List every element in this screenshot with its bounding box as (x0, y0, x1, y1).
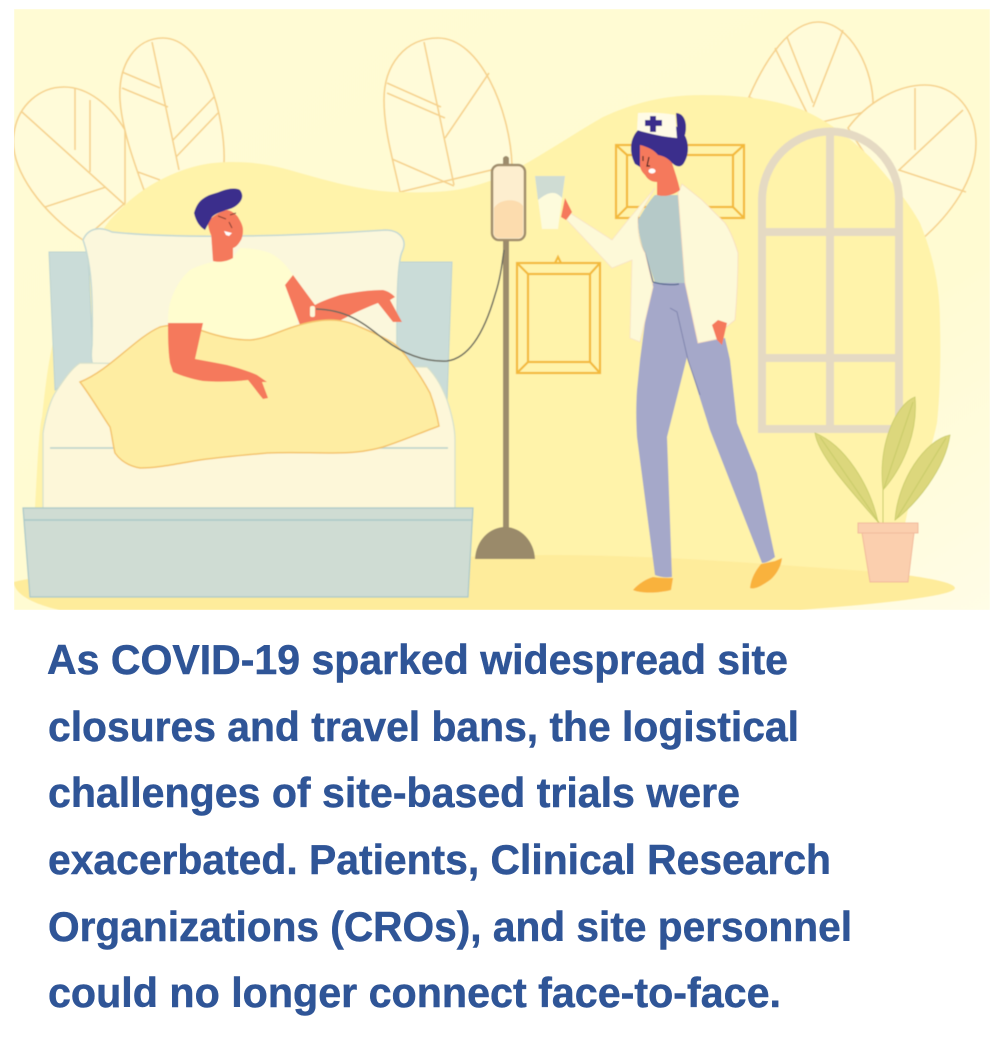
leaf outline: far left (13, 87, 125, 240)
caption text: closures and travel bans, the logistical (48, 703, 799, 750)
leaf outline: upper right (749, 22, 873, 125)
caption text: Organizations (CROs), and site personnel (48, 903, 852, 950)
IV tube (316, 250, 504, 361)
mattress (43, 363, 455, 510)
caption text: challenges of site-based trials were (48, 769, 740, 816)
cap cross (645, 116, 662, 132)
patient neck and head (194, 189, 243, 262)
nurse coat left side (567, 188, 655, 342)
patient mouth (224, 231, 232, 236)
illustration: patient and nurse in hospital room (13, 9, 990, 610)
picture frame: lower (517, 257, 600, 373)
nurse eye and nose (643, 156, 650, 166)
nurse coat right side (678, 184, 738, 343)
pillow (83, 229, 404, 372)
nurse neck and face (640, 145, 680, 196)
nurse hand on hip (712, 320, 727, 345)
nurse trousers (636, 283, 775, 577)
plant leaves (815, 397, 950, 522)
nurse mouth (648, 168, 656, 174)
patient right arm (285, 275, 402, 325)
nurse raised hand (561, 198, 572, 220)
nurse shirt (637, 195, 685, 285)
IV bag (492, 165, 525, 240)
background leaves (13, 22, 976, 240)
floor (14, 555, 955, 610)
IV stand (475, 156, 535, 559)
leaf outline: second left (120, 38, 224, 190)
wrist band (310, 306, 315, 317)
caption text: As COVID-19 sparked widespread site (47, 636, 788, 683)
potted plant (815, 397, 950, 582)
yellow wall blob (30, 95, 940, 600)
nurse cap (637, 113, 677, 138)
caption text: could no longer connect face-to-face. (48, 969, 781, 1016)
room background (14, 9, 990, 610)
patient hair (194, 189, 242, 230)
patient shirt (168, 248, 298, 345)
bed (23, 229, 473, 597)
nurse bun (676, 113, 686, 138)
headboard (49, 252, 452, 403)
window (762, 132, 899, 429)
leaf outline: centre (384, 38, 512, 192)
plant pot (858, 523, 918, 582)
patient left arm (168, 323, 268, 399)
bed base (23, 508, 473, 597)
patient (80, 156, 535, 559)
caption text (47, 636, 852, 1016)
caption text: exacerbated. Patients, Clinical Research (48, 836, 831, 883)
nurse (535, 113, 782, 593)
nurse hair (631, 122, 688, 170)
blanket (80, 320, 439, 468)
picture frame: upper (616, 145, 744, 218)
glass of water (535, 176, 565, 229)
leaf outline: far right (848, 85, 976, 240)
nurse shoes (633, 558, 782, 593)
